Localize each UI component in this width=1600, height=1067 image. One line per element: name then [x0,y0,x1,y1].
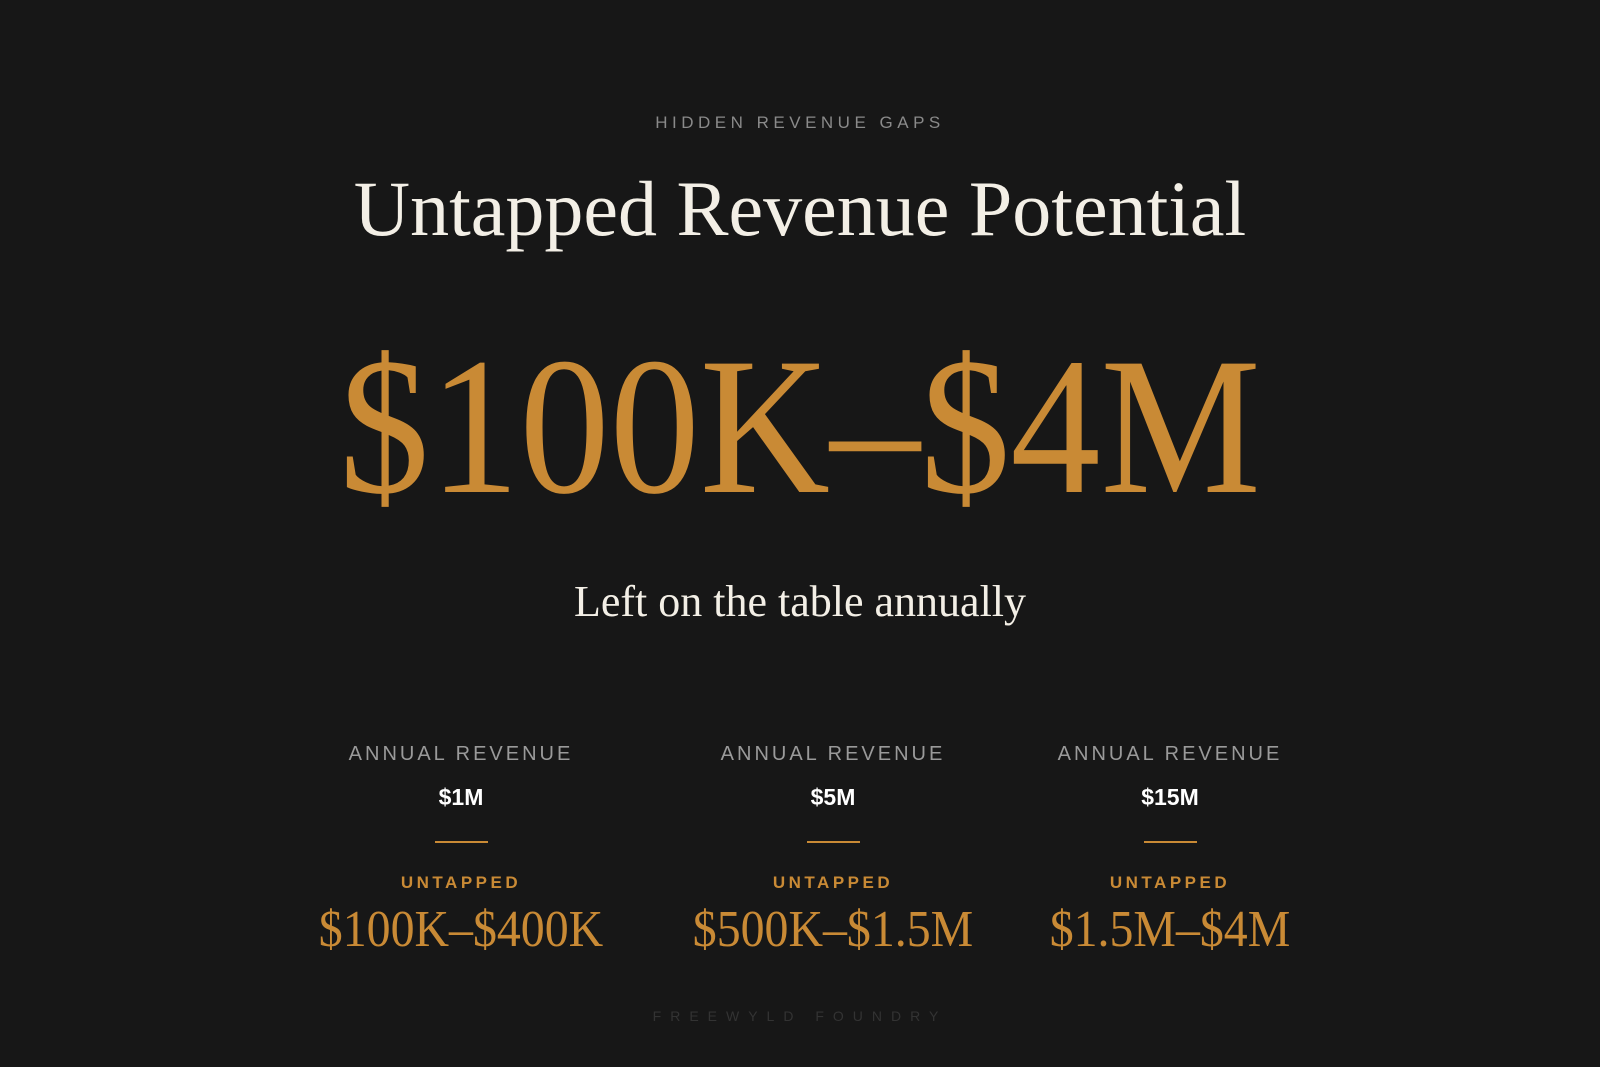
column: $15M: ANNUAL REVENUE [1058,743,1282,765]
subtitle: Left on the table annually [574,577,1026,626]
column: $5M: $500K–$1.5M [693,901,973,958]
column: $1M: $1M [439,784,483,810]
column: $1M [319,743,603,958]
column: $1M: $100K–$400K [319,901,603,958]
column: $15M: UNTAPPED [1110,873,1230,892]
footer: FREEWYLD FOUNDRY [653,1008,947,1024]
eyebrow: HIDDEN REVENUE GAPS [655,113,945,132]
column: $5M: $5M [811,784,855,810]
column: $1M: ANNUAL REVENUE [349,743,573,765]
column: $1M: UNTAPPED [401,873,521,892]
column: $15M [1050,743,1290,958]
column: $5M [693,743,973,958]
title: Untapped Revenue Potential [354,165,1246,252]
big number: $100K–$4M [339,318,1261,535]
column: $5M: ANNUAL REVENUE [721,743,945,765]
column: $5M: UNTAPPED [773,873,893,892]
column: $15M: $1.5M–$4M [1050,901,1290,958]
column: $15M: $15M [1141,784,1199,810]
